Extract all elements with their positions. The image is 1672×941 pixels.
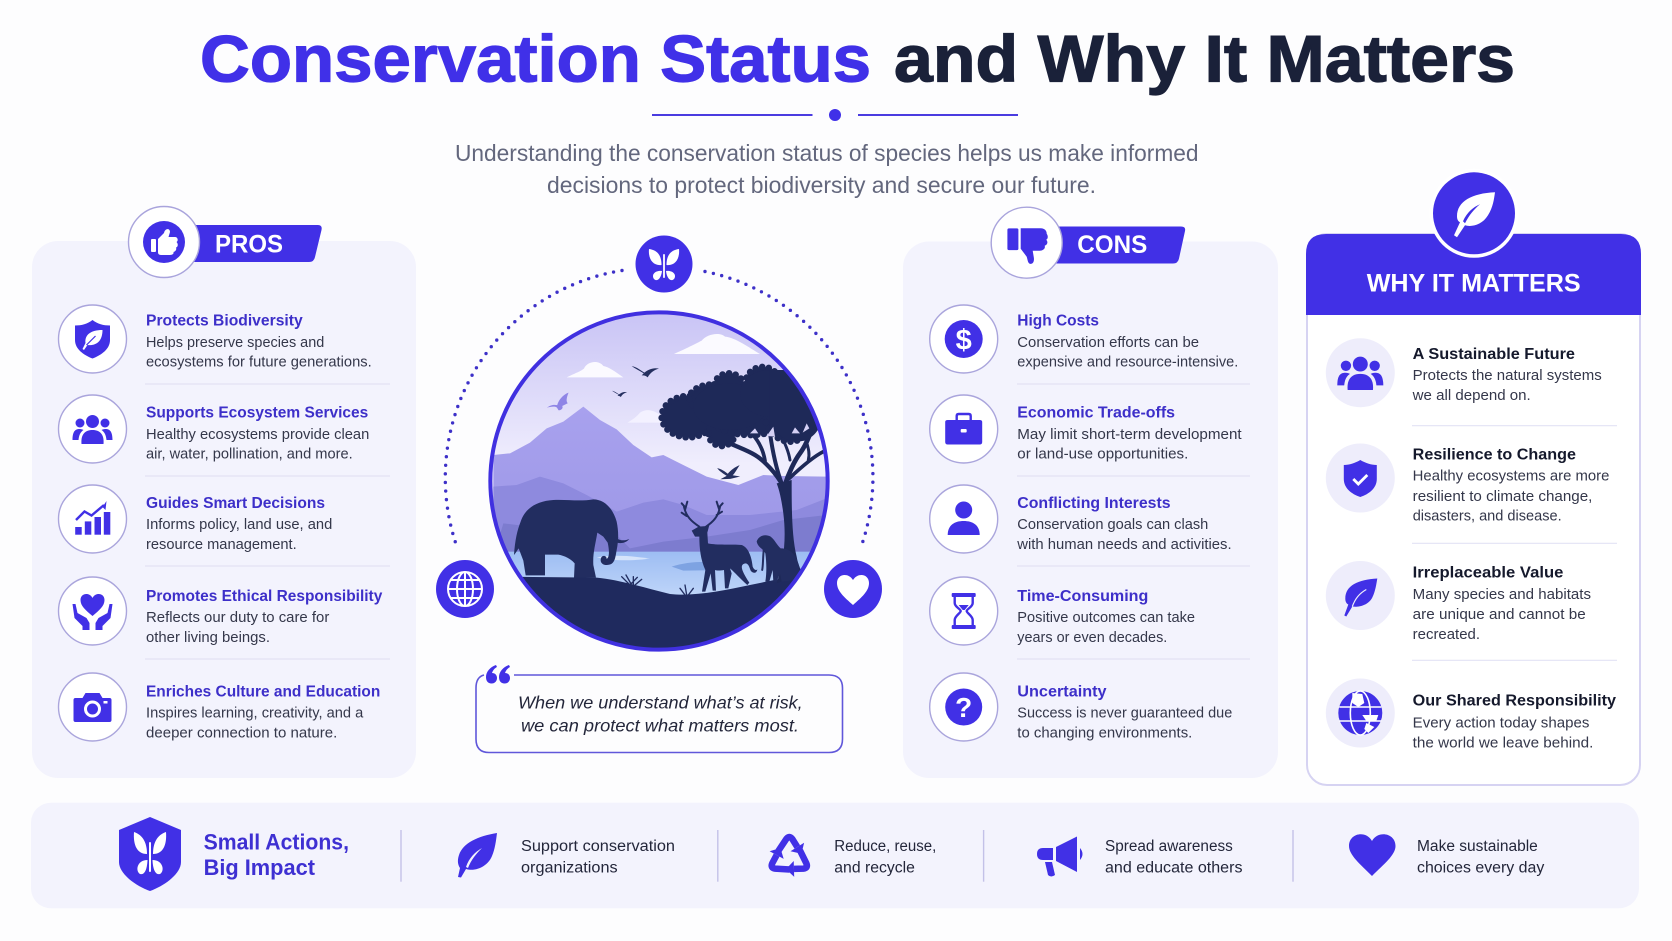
text: resilience to change: Resilience to Change (1413, 446, 1576, 464)
subtitle (455, 140, 1198, 198)
text: a sustainable future: A Sustainable Future (1413, 346, 1575, 363)
heading: small actions: Big Impact (204, 855, 316, 880)
text: protects biodiversity: Protects Biodiversity (146, 312, 303, 330)
why heading (1306, 169, 1641, 315)
title: and Why It Matters (894, 22, 1515, 96)
text: resilience to change (1413, 446, 1609, 525)
text: resilience to change: Healthy ecosystems are more (1413, 469, 1609, 485)
text: economic trade-offs (1017, 404, 1242, 462)
heading: small actions (204, 829, 349, 880)
dotted arc (445, 270, 873, 547)
text: time-consuming: years or even decades. (1017, 630, 1167, 646)
panel: why it matters (1306, 169, 1641, 785)
birds (612, 366, 741, 480)
text: support conservation: Support conservation (521, 838, 675, 855)
icon: person (930, 485, 998, 553)
text: protects biodiversity: Helps preserve species and (146, 335, 324, 351)
text: irreplaceable value: Many species and habitats (1413, 587, 1591, 603)
text: guides smart decisions (146, 495, 332, 553)
text: promotes ethical responsibility (146, 588, 382, 646)
why heading: WHY IT MATTERS (1367, 270, 1581, 298)
text: our shared responsibility: Every action today shapes (1413, 715, 1589, 731)
icon: shield sprout (119, 817, 181, 891)
text: our shared responsibility: the world we leave behind. (1413, 735, 1593, 751)
text: enriches culture and education: deeper connection to nature. (146, 725, 337, 741)
clouds (567, 334, 760, 423)
dividers (1412, 426, 1617, 660)
text: time-consuming: Time-Consuming (1017, 588, 1148, 605)
text: supports ecosystem services: air, water, pollination, and more. (146, 446, 353, 462)
subtitle: decisions to protect biodiversity and secure our future. (547, 172, 1096, 198)
icon: people (58, 395, 126, 463)
icon: quotation marks (486, 665, 510, 684)
icon: question mark: ? (955, 692, 972, 723)
icon: megaphone (1037, 836, 1082, 876)
panel: cons (903, 207, 1278, 778)
icon: sprout badge (636, 236, 692, 292)
text: conflicting interests: with human needs and activities. (1016, 537, 1232, 553)
panel: pros (32, 206, 416, 778)
icon: rising chart (58, 485, 126, 553)
icon: heart badge (824, 560, 882, 618)
text: support conservation (521, 838, 675, 876)
text: resilience to change: disasters, and disease. (1413, 509, 1562, 525)
deer (692, 523, 757, 592)
text: enriches culture and education: Enriches Culture and Education (146, 684, 380, 700)
text: conflicting interests: Conservation goals can clash (1017, 517, 1208, 533)
text: protects biodiversity: ecosystems for future generations. (146, 355, 372, 371)
quote box (476, 665, 842, 752)
text: our shared responsibility (1413, 693, 1616, 751)
icon: shield check (1326, 444, 1395, 512)
text: irreplaceable value: Irreplaceable Value (1413, 565, 1563, 582)
title: Conservation Status (200, 22, 871, 96)
ground (522, 576, 793, 648)
text: supports ecosystem services (146, 404, 369, 462)
text: high costs (1017, 312, 1238, 371)
icon: dollar (930, 305, 998, 373)
text: economic trade-offs: Economic Trade-offs (1017, 404, 1175, 421)
dividers (401, 830, 1293, 882)
subtitle: Understanding the conservation status of species helps us make informed (455, 140, 1198, 166)
text: high costs: High Costs (1017, 312, 1099, 330)
cons heading (991, 207, 1185, 278)
text: uncertainty: Success is never guaranteed due (1017, 705, 1232, 721)
text: promotes ethical responsibility: Reflects our duty to care for (146, 610, 329, 626)
text: sustainable choices: Make sustainable (1417, 838, 1538, 855)
icon: question mark (930, 673, 998, 741)
icon: leaf (1454, 192, 1495, 237)
text: protects biodiversity (146, 312, 372, 371)
panel: small actions band (31, 803, 1639, 908)
icon: leaf (1326, 561, 1395, 630)
centre illustration group (436, 236, 882, 752)
icon: recycle (765, 837, 812, 880)
text: promotes ethical responsibility: other living beings. (146, 630, 270, 646)
icon: hourglass (930, 577, 998, 645)
dividers (145, 384, 390, 659)
cons heading: CONS (1077, 231, 1147, 259)
icon: globe badge (436, 560, 494, 618)
text: support conservation: organizations (521, 859, 618, 876)
text: a sustainable future (1412, 346, 1602, 404)
text: resilience to change: resilient to climate change, (1413, 489, 1592, 505)
icon: thumbs up (151, 229, 178, 255)
text: supports ecosystem services: Supports Ecosystem Services (146, 404, 368, 421)
text: spread awareness: and educate others (1105, 859, 1243, 876)
text: spread awareness (1105, 838, 1243, 876)
grass (622, 575, 693, 595)
icon: heart in hands (58, 577, 126, 645)
text: guides smart decisions: Guides Smart Decisions (146, 495, 325, 512)
text: enriches culture and education (146, 684, 380, 741)
text: spread awareness: Spread awareness (1105, 838, 1233, 855)
icon: heart (1349, 834, 1396, 876)
mountains (493, 406, 826, 515)
text: economic trade-offs: May limit short-term development (1017, 427, 1242, 443)
lake (508, 552, 810, 595)
icon: shield with leaf (58, 305, 126, 373)
text: guides smart decisions: Informs policy, land use, and (146, 517, 332, 533)
text: sustainable choices: choices every day (1417, 859, 1545, 876)
icon: thumbs down (1007, 228, 1048, 264)
text: uncertainty (1017, 684, 1232, 741)
quote text: When we understand what’s at risk, (518, 692, 803, 712)
pros heading (128, 206, 322, 278)
text: high costs: Conservation efforts can be (1017, 335, 1199, 351)
text: supports ecosystem services: Healthy ecosystems provide clean (146, 427, 369, 443)
icon: people (1326, 338, 1395, 407)
text: irreplaceable value: are unique and cannot be (1413, 607, 1586, 623)
text: reduce reuse: and recycle (834, 859, 915, 876)
icon: earth globe (1326, 678, 1395, 748)
text: a sustainable future: we all depend on. (1412, 388, 1531, 404)
dog (757, 535, 799, 582)
text: a sustainable future: Protects the natural systems (1413, 368, 1602, 384)
text: conflicting interests (1016, 495, 1232, 553)
text: economic trade-offs: or land-use opportunities. (1017, 446, 1188, 462)
text: our shared responsibility: Our Shared Responsibility (1413, 693, 1616, 710)
heading: small actions: Small Actions, (204, 829, 349, 854)
pros heading: PROS (215, 230, 283, 258)
icon: camera (58, 673, 126, 741)
text: irreplaceable value (1413, 565, 1591, 643)
text: reduce reuse: Reduce, reuse, (834, 838, 936, 855)
title (200, 22, 1515, 96)
icon: leaf (458, 833, 497, 878)
elephant (514, 499, 618, 578)
dividers (1017, 384, 1250, 659)
text: reduce reuse (834, 838, 936, 876)
text: high costs: expensive and resource-intensive. (1017, 355, 1238, 371)
text: conflicting interests: Conflicting Interests (1017, 495, 1171, 512)
title divider (652, 109, 1018, 121)
text: promotes ethical responsibility: Promotes Ethical Responsibility (146, 588, 382, 605)
text: uncertainty: to changing environments. (1017, 725, 1192, 741)
quote text (518, 692, 803, 736)
text: time-consuming: Positive outcomes can take (1017, 610, 1195, 626)
text: uncertainty: Uncertainty (1017, 684, 1107, 700)
text: irreplaceable value: recreated. (1413, 627, 1480, 643)
text: sustainable choices (1417, 838, 1545, 876)
text: guides smart decisions: resource management. (146, 537, 297, 553)
landscape circle (487, 310, 833, 657)
tree (731, 434, 824, 483)
quote text: we can protect what matters most. (521, 716, 799, 736)
icon: dollar: $ (956, 324, 972, 356)
text: time-consuming (1017, 588, 1195, 646)
icon: briefcase (930, 395, 998, 463)
text: enriches culture and education: Inspires learning, creativity, and a (146, 705, 364, 721)
